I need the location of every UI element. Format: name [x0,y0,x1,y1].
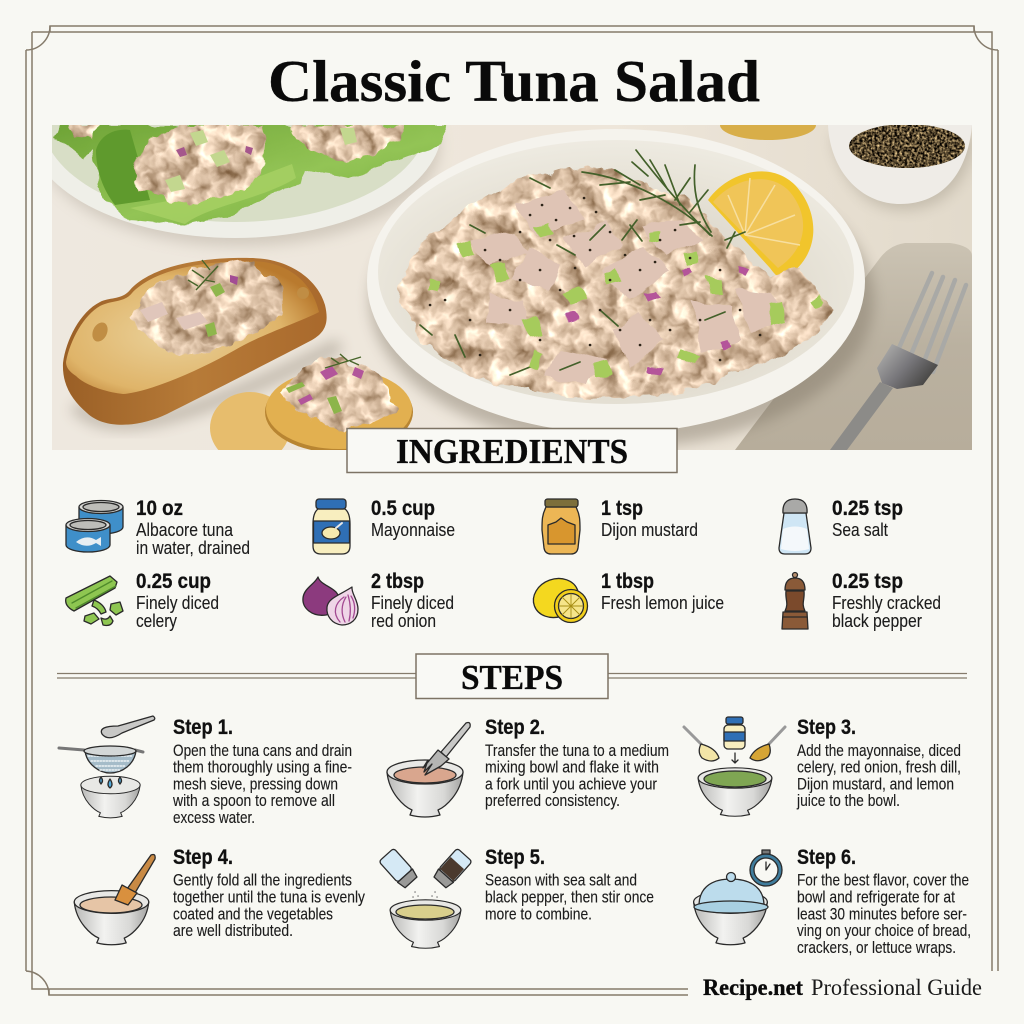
mustard dish [720,125,816,140]
step 6: crackers, or lettuce wraps. [797,939,956,957]
steps heading rule [57,674,967,678]
step 1: excess water. [173,809,255,827]
step 2: Transfer the tuna to a medium [485,742,669,760]
ingredient: mayonnaise [313,496,455,554]
ingredient: tuna: 10 oz [136,496,183,520]
step 2: a fork until you achieve your [485,776,657,794]
icon: pepper mill [782,572,808,629]
icon: bowl with spatula [74,854,155,945]
step 1: Step 1. [173,715,233,739]
step 6: least 30 minutes before ser- [797,906,967,924]
icon: salt shaker [779,499,811,554]
red onion pieces [565,265,748,374]
step 3: celery, red onion, fresh dill, [797,758,961,776]
ingredient: sea salt: 0.25 tsp [832,496,903,520]
ingredient: red onion [303,569,454,631]
ingredient: tuna: Albacore tuna [136,519,234,540]
fork on napkin [830,273,966,450]
ingredient: black pepper: black pepper [832,610,922,631]
step 5: Season with sea salt and [485,872,637,890]
lemon wedge [708,171,813,278]
step 4: are well distributed. [173,922,293,940]
plate with lettuce wraps [52,125,446,250]
step 1: Open the tuna cans and drain [173,742,352,760]
step 1: them thoroughly using a fine- [173,758,352,776]
steps heading [416,654,608,698]
step 2 [387,715,669,817]
step 4: together until the tuna is evenly [173,888,366,906]
step 5: Step 5. [485,845,545,869]
ingredient: black pepper: 0.25 tsp [832,569,903,593]
ingredient: red onion: 2 tbsp [371,569,424,593]
tuna chunks [470,191,788,385]
ingredient: sea salt [779,496,903,554]
hero photo: tuna salad servings on a table [52,125,972,450]
ingredient: lemon: Fresh lemon juice [601,592,724,613]
ingredient: mayonnaise: 0.5 cup [371,496,435,520]
step 4 [74,845,366,945]
toast with tuna salad [63,258,340,425]
dill sprig [420,150,745,375]
celery cubes [428,223,824,378]
crackers with tuna salad [210,354,413,450]
step 3: Add the mayonnaise, diced [797,742,961,760]
ingredient: red onion: Finely diced [371,592,454,613]
ingredient: celery: celery [136,610,178,631]
icon: covered bowl and stopwatch [694,850,782,945]
napkin [735,243,972,450]
step 1: mesh sieve, pressing down [173,776,338,794]
step 6: For the best flavor, cover the [797,872,969,890]
title: Classic Tuna Salad [268,48,760,114]
ingredient: sea salt: Sea salt [832,519,888,540]
ingredient: lemon [528,569,724,624]
step 3 [684,715,961,816]
step 1 [59,715,352,827]
ingredient: tuna: in water, drained [136,537,250,558]
step 3: juice to the bowl. [796,792,900,810]
step 2: mixing bowl and flake it with [485,758,659,776]
ingredient: black pepper: Freshly cracked [832,592,941,613]
ingredients heading [347,428,677,472]
ingredient: mustard: 1 tsp [601,496,643,520]
ingredient: black pepper [782,569,941,631]
step 2: preferred consistency. [485,792,620,810]
ingredient: tuna [66,496,250,558]
ingredient: mayonnaise: Mayonnaise [371,519,455,540]
step 3: Step 3. [797,715,856,739]
step 6: bowl and refrigerate for at [797,888,955,906]
icon: tuna cans [66,500,123,552]
step 4: Step 4. [173,845,233,869]
icon: spoon, sieve and draining bowl [59,716,155,818]
icon: mayo jar, spoons and bowl [684,717,785,816]
step 6: Step 6. [797,845,856,869]
ingredients heading: INGREDIENTS [396,432,628,471]
icon: diced celery [66,576,123,626]
footer credit: Professional Guide [811,975,982,1000]
step 2: Step 2. [485,715,545,739]
footer credit [703,975,982,1000]
step 4: Gently fold all the ingredients [173,872,352,890]
step 5: black pepper, then stir once [485,888,654,906]
main white bowl of tuna salad [367,129,874,448]
step 5: more to combine. [485,906,592,924]
cracked pepper flecks [430,198,760,360]
icon: lemon and slice [528,572,588,624]
step 1: with a spoon to remove all [172,792,335,810]
steps heading: STEPS [461,658,563,697]
icon: bowl with fork flaking tuna [387,722,470,817]
step 4: coated and the vegetables [173,906,333,924]
ingredient: celery: 0.25 cup [136,569,211,593]
small pepper bowl [828,124,976,210]
icon: mustard jar [542,499,580,554]
icon: red onion [303,577,358,625]
icon: salt and pepper shakers over bowl [379,848,472,948]
step 6: ving on your choice of bread, [797,922,971,940]
ingredient: lemon: 1 tbsp [601,569,654,593]
icon: mayonnaise jar [313,499,350,554]
ingredient: mustard: Dijon mustard [601,519,698,540]
footer credit: Recipe.net [703,975,803,1000]
ingredient: mustard [542,496,698,554]
ingredient: celery: Finely diced [136,592,219,613]
step 6 [694,845,971,957]
ingredient: red onion: red onion [371,610,436,631]
ingredient: celery [66,569,219,631]
step 3: Dijon mustard, and lemon [797,776,954,794]
step 5 [379,845,654,948]
